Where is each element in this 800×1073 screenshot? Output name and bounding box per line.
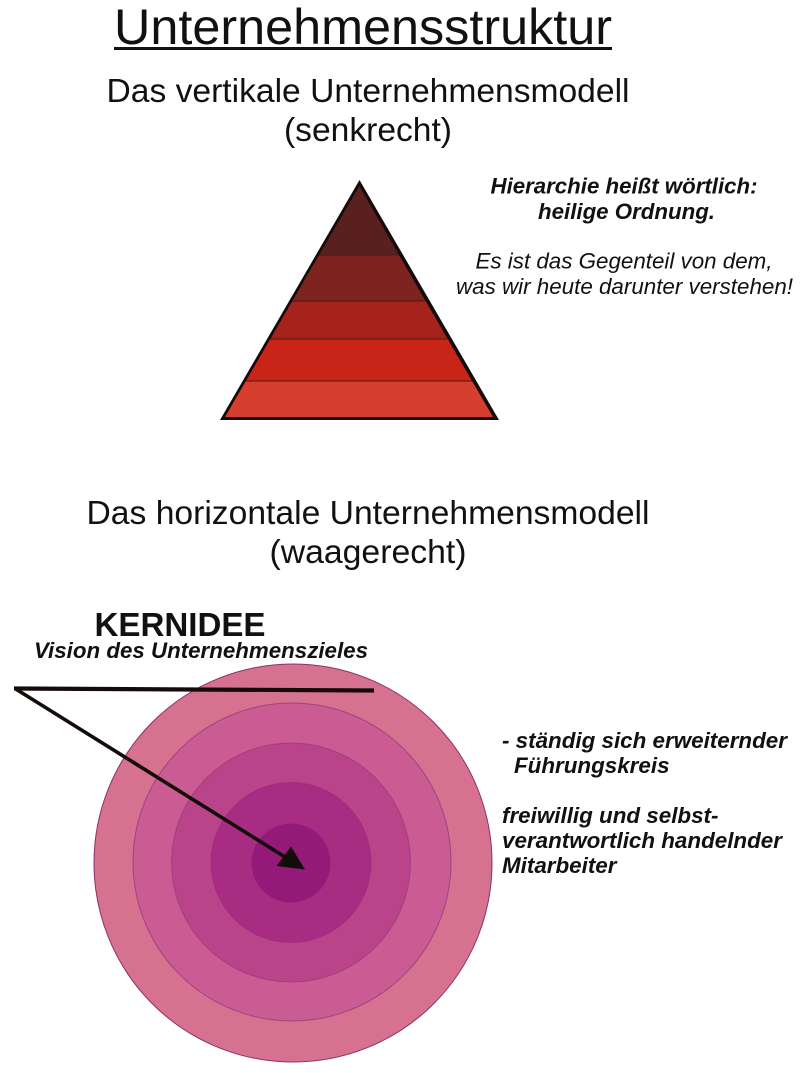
text block: hierarchy definition: Es ist das Gegenteil von dem, [476, 248, 772, 274]
text block: leadership circle: freiwillig und selbst- [502, 803, 718, 828]
label: core idea [34, 606, 368, 663]
text block: leadership circle [502, 728, 788, 878]
pyramid chart [220, 180, 499, 420]
heading: horizontal model: Das horizontale Unternehmensmodell [86, 494, 650, 531]
title: Unternehmensstruktur [114, 0, 612, 55]
text block: hierarchy definition: heilige Ordnung. [538, 199, 715, 224]
label: core idea: KERNIDEE [94, 606, 266, 643]
concentric circles chart [94, 664, 492, 1062]
heading: horizontal model [86, 494, 650, 570]
text block: leadership circle: Führungskreis [514, 753, 670, 778]
text block: leadership circle: - ständig sich erweiternder [502, 728, 788, 753]
heading: vertical model: Das vertikale Unternehmensmodell [106, 72, 630, 109]
text block: hierarchy definition [456, 174, 793, 299]
text block: hierarchy definition: Hierarchie heißt wörtlich: [490, 174, 758, 198]
text block: hierarchy definition: was wir heute darunter verstehen! [456, 274, 793, 299]
heading: horizontal model: (waagerecht) [270, 533, 466, 570]
label: core idea: Vision des Unternehmenszieles [34, 638, 368, 663]
text block: leadership circle: Mitarbeiter [502, 853, 618, 878]
heading: vertical model: (senkrecht) [284, 111, 452, 148]
heading: vertical model [106, 72, 630, 148]
text block: leadership circle: verantwortlich handelnder [502, 828, 783, 853]
arrow: from core idea to centre [14, 688, 374, 870]
